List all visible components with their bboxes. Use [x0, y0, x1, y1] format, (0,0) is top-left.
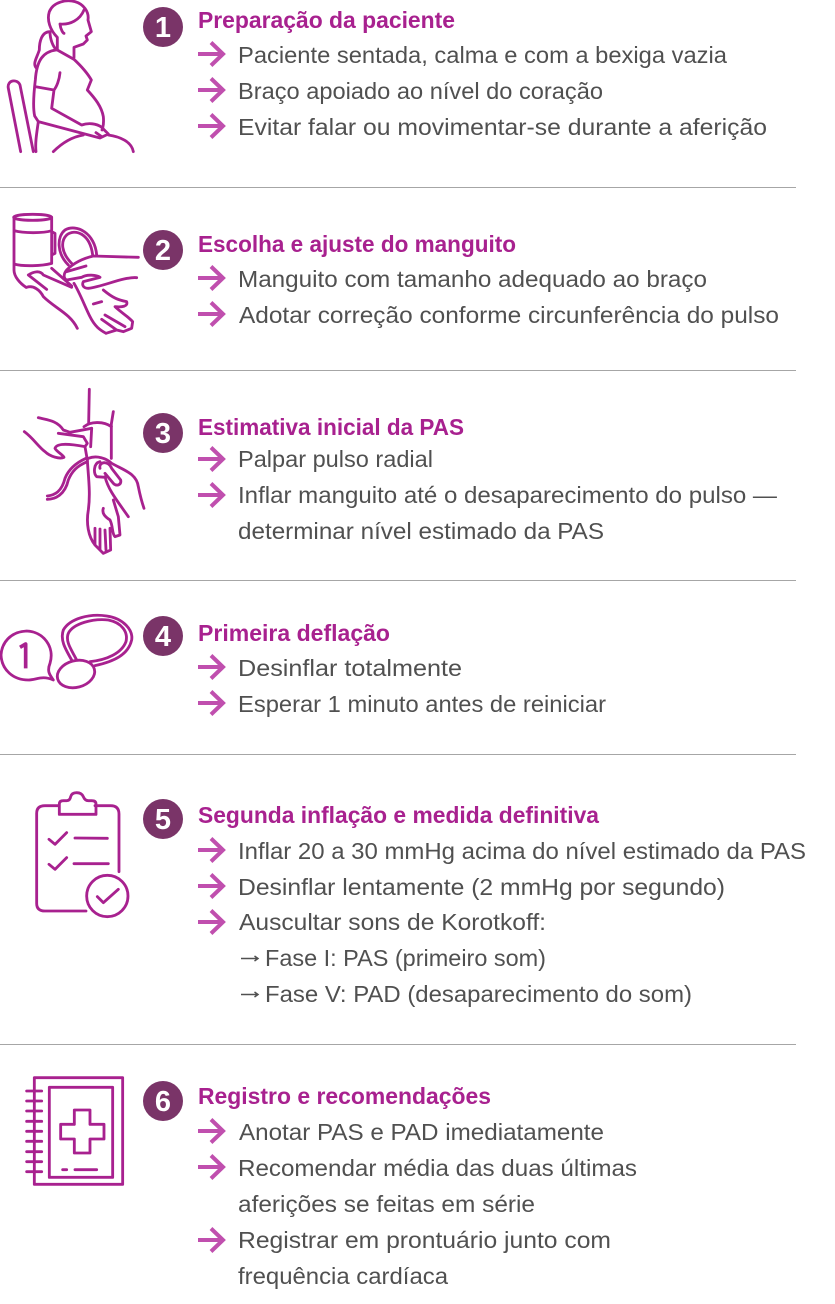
panel: step 3 — [24, 389, 777, 553]
badge: number 1 — [143, 7, 183, 47]
list item — [198, 482, 777, 544]
badge: number 4 — [143, 616, 183, 656]
list item: aferições se feitas em série — [238, 1191, 535, 1217]
list item: Auscultar sons de Korotkoff: — [239, 909, 546, 935]
badge: number 4: 4 — [155, 621, 171, 653]
heading: step 5: Segunda inflação e medida definitiva — [198, 802, 599, 828]
badge: number 2: 2 — [155, 235, 171, 267]
badge: number 1: 1 — [155, 12, 171, 44]
list item: Registrar em prontuário junto com — [238, 1227, 611, 1253]
icon: one-minute speech bubble and cuff bulb — [1, 615, 132, 692]
badge: number 5: 5 — [155, 804, 171, 836]
list item — [198, 1155, 637, 1217]
list item: Desinflar totalmente — [238, 655, 462, 681]
list item: Inflar 20 a 30 mmHg acima do nível estimado da PAS — [238, 838, 806, 864]
list item: Esperar 1 minuto antes de reiniciar — [238, 691, 606, 717]
list item: Evitar falar ou movimentar-se durante a aferição — [238, 114, 767, 140]
icon: medical record notebook — [27, 1078, 123, 1184]
icon: seated pregnant patient — [8, 1, 133, 152]
list item: Desinflar lentamente (2 mmHg por segundo) — [238, 874, 725, 900]
panel: step 2 — [14, 214, 779, 333]
panel: step 5 — [37, 793, 806, 1007]
list item: Paciente sentada, calma e com a bexiga vazia — [238, 42, 727, 68]
list item: Adotar correção conforme circunferência do pulso — [239, 302, 779, 328]
icon: palpating radial pulse — [24, 389, 144, 553]
list item: Recomendar média das duas últimas — [238, 1155, 637, 1181]
list item: Anotar PAS e PAD imediatamente — [239, 1119, 604, 1145]
list item: determinar nível estimado da PAS — [238, 518, 604, 544]
badge: number 6 — [143, 1081, 183, 1121]
badge: number 2 — [143, 230, 183, 270]
heading: step 6: Registro e recomendações — [198, 1083, 491, 1109]
list item: frequência cardíaca — [238, 1263, 448, 1289]
panel: step 4 — [1, 615, 606, 717]
list item: Braço apoiado ao nível do coração — [238, 78, 603, 104]
list item: Fase V: PAD (desaparecimento do som) — [265, 981, 692, 1007]
badge: number 5 — [143, 799, 183, 839]
heading: step 1: Preparação da paciente — [198, 7, 455, 33]
list item: Inflar manguito até o desaparecimento do pulso — — [238, 482, 777, 508]
panel: step 6 — [27, 1078, 637, 1289]
list item: Palpar pulso radial — [238, 446, 433, 472]
list item — [198, 1227, 611, 1289]
heading: step 2: Escolha e ajuste do manguito — [198, 231, 516, 257]
list item — [198, 909, 692, 1007]
heading: step 3: Estimativa inicial da PAS — [198, 414, 464, 440]
icon: clipboard checklist — [37, 793, 128, 917]
badge: number 3: 3 — [155, 418, 171, 450]
icon: hands fitting cuff — [14, 214, 138, 333]
list item: Manguito com tamanho adequado ao braço — [238, 266, 707, 292]
badge: number 6: 6 — [155, 1086, 171, 1118]
list item: Fase I: PAS (primeiro som) — [265, 945, 546, 971]
badge: number 3 — [143, 413, 183, 453]
heading: step 4: Primeira deflação — [198, 620, 390, 646]
panel: step 1 — [8, 1, 767, 152]
